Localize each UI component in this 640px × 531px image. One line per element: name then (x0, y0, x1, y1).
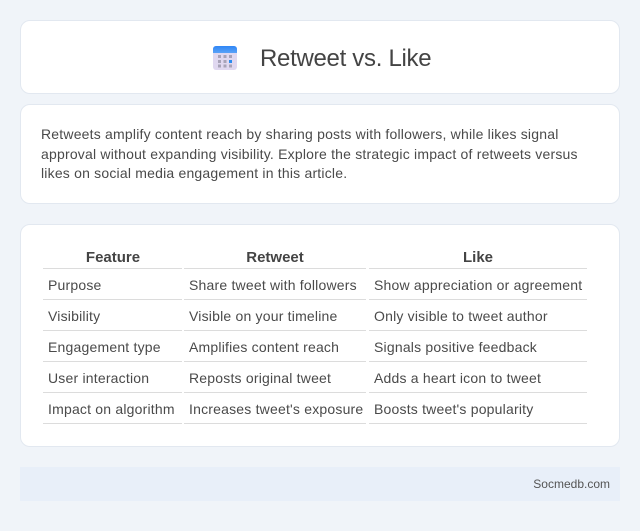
row: visibility: Visibility (48, 308, 100, 324)
row: impact on algorithm: Impact on algorithm (48, 401, 175, 417)
row: engagement type: Amplifies content reach (189, 339, 339, 355)
title: Retweet vs. Like (260, 45, 431, 72)
row: impact on algorithm: Increases tweet's exposure (189, 401, 363, 417)
panel: comparison table (20, 224, 620, 447)
row: impact on algorithm (48, 401, 534, 417)
panel: introduction (20, 104, 620, 204)
footer bar (20, 467, 620, 501)
row: purpose (48, 277, 582, 293)
intro text (41, 126, 578, 181)
table header (86, 249, 493, 266)
row: visibility: Visible on your timeline (189, 308, 338, 324)
row: engagement type (48, 339, 537, 355)
intro text: approval without expanding visibility. Explore the strategic impact of retweets versus (41, 146, 578, 162)
icon: calendar grid (213, 46, 237, 70)
panel: title header (20, 20, 620, 94)
row: purpose: Share tweet with followers (189, 277, 357, 293)
footer text: Socmedb.com (533, 477, 610, 491)
row: visibility: Only visible to tweet author (374, 308, 548, 324)
row: engagement type: Engagement type (48, 339, 161, 355)
row: purpose: Show appreciation or agreement (374, 277, 582, 293)
intro text: Retweets amplify content reach by sharing posts with followers, while likes signal (41, 126, 559, 142)
row: user interaction: Reposts original tweet (189, 370, 331, 386)
row: visibility (48, 308, 548, 324)
table header: Like (463, 249, 493, 266)
row: user interaction: Adds a heart icon to tweet (374, 370, 541, 386)
row: engagement type: Signals positive feedback (374, 339, 537, 355)
table header: Retweet (246, 249, 304, 266)
row: user interaction: User interaction (48, 370, 149, 386)
table header: Feature (86, 249, 140, 266)
intro text: likes on social media engagement in this article. (41, 165, 347, 181)
row: impact on algorithm: Boosts tweet's popularity (374, 401, 533, 417)
row: purpose: Purpose (48, 277, 102, 293)
row: user interaction (48, 370, 541, 386)
